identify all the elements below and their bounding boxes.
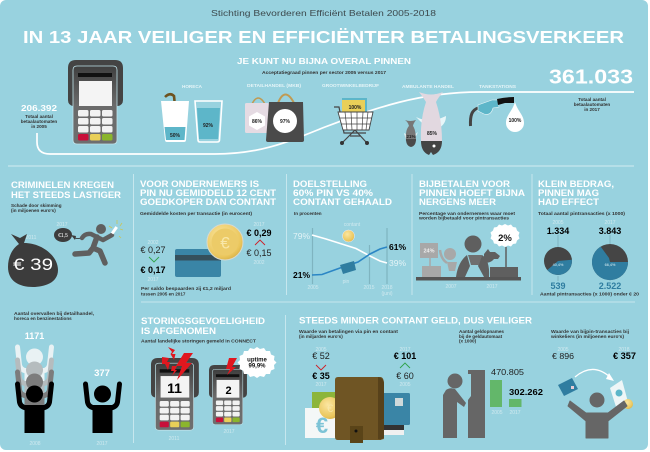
panel: bijbetalen [416, 179, 525, 290]
cost right: 2002 [253, 260, 265, 266]
panel: criminelen [8, 180, 123, 287]
panel: criminelen: 2017 [56, 222, 68, 228]
heading: VOOR ONDERNEMERS IS [140, 179, 259, 189]
panel: overvallen: 2017 [96, 441, 108, 447]
bar chart: opnames: 470.805 [491, 368, 525, 377]
note: tussen 2005 en 2017 [141, 292, 186, 296]
line chart [293, 222, 406, 297]
icon: lightning bolts [162, 347, 237, 380]
illustration: shop counter: 2017 [486, 284, 498, 290]
subtext: worden bijbetaald voor pintransacties [418, 216, 509, 220]
subtext left: (in miljarden euro's) [299, 334, 343, 339]
subtext middle: bij de geldautomaat [459, 334, 503, 339]
title: IN 13 JAAR VEILIGER EN EFFICIËNTER BETALINGSVERKEER [23, 27, 624, 47]
panel: minder contant [299, 316, 636, 443]
values pin: 2005 [315, 347, 327, 353]
horeca glasses: HORECA [182, 84, 203, 89]
subtext: Totaal aantal pintransacties (x 1000) [538, 211, 626, 216]
stat 2017: Totaal aantal [578, 97, 606, 102]
heading: NERGENS MEER [419, 197, 496, 207]
heading: STORINGSGEVOELIGHEID [141, 316, 265, 326]
stat 2005: in 2005 [31, 124, 47, 129]
icon: wallet with money: € [316, 413, 328, 438]
line chart: (juni) [381, 291, 393, 297]
callout: uptime: 99,9% [248, 364, 266, 370]
values contant: € 60 [396, 371, 414, 381]
icon: person with card and cash [558, 369, 633, 438]
icon: small money bag: €1,5 [58, 233, 68, 239]
pie 2005: 2005 [552, 220, 564, 226]
line chart: 79% [293, 231, 310, 241]
heading: HAD EFFECT [538, 197, 599, 207]
values bijpin: 2005 [557, 347, 569, 353]
callout: uptime: uptime [247, 358, 267, 364]
icon: bank card [175, 249, 221, 277]
groot winkelbedrijf cart [322, 83, 379, 145]
detailhandel bags: 86% [252, 119, 263, 125]
icon: payment terminal [68, 60, 123, 144]
growth curve [37, 92, 634, 154]
horeca glasses: 50% [170, 133, 181, 139]
line chart: 39% [389, 258, 406, 268]
icon: wallet with money: € [327, 403, 333, 415]
subtext: (in miljoenen euro's) [11, 208, 56, 213]
bar chart: opnames [490, 368, 544, 416]
groot winkelbedrijf cart: GROOTWINKELBEDRIJF [322, 83, 379, 88]
cost right: 2017 [253, 222, 265, 228]
icon: ATM user [443, 370, 485, 438]
stat 2017: in 2017 [584, 107, 600, 112]
subtext: horeca en benzinestations [14, 316, 72, 321]
stat 2017: 361.033 [549, 66, 633, 88]
heading: BIJBETALEN VOOR [419, 179, 510, 189]
pie 2005: 539 [550, 281, 566, 291]
horeca glasses: 92% [203, 123, 214, 129]
figure 2017 [86, 384, 120, 433]
panel: overvallen [14, 311, 120, 447]
icon: money bag 39: € 39 [13, 255, 53, 274]
bar chart: opnames: 302.262 [509, 388, 544, 397]
values bijpin: 2018 [618, 347, 630, 353]
line chart: 61% [389, 242, 406, 252]
line chart: 2018 [381, 285, 393, 291]
cost left: 2002 [147, 240, 159, 246]
pie 2017: 2017 [604, 220, 616, 226]
values pin: € 52 [312, 351, 330, 361]
panel: storingen [141, 316, 276, 442]
pie 2017: 2.522 [599, 281, 621, 291]
heading: GOEDKOPER DAN CONTANT [140, 197, 276, 207]
heading: DOELSTELLING [293, 179, 367, 189]
note: Per saldo bespaarden zij €1,2 miljard [141, 286, 231, 291]
stat 2005: betaalautomaten [21, 119, 57, 124]
subtext right: winkeliers (in miljoenen euro's) [550, 334, 624, 339]
subtext: Percentage van ondernemers waar moet [419, 211, 516, 216]
heading: CONTANT GEHAALD [293, 197, 392, 207]
subtext: Aantal landelijke storingen gemeld in CONNECT [141, 338, 256, 344]
heading: IS AFGENOMEN [141, 326, 216, 336]
horeca glasses [161, 84, 222, 142]
heading: KLEIN BEDRAG, [538, 179, 614, 189]
detailhandel bags: DETAILHANDEL (MKB) [247, 83, 302, 88]
line chart: 2015 [363, 285, 375, 291]
pie 2005 [544, 220, 572, 291]
panel: doelstelling [293, 179, 406, 297]
values contant [394, 347, 416, 388]
heading: CRIMINELEN KREGEN [11, 180, 114, 190]
panel: klein bedrag [538, 179, 639, 296]
values pin [312, 347, 330, 388]
ambulante handel fish [402, 84, 454, 155]
panel: ondernemers [140, 179, 276, 296]
stat 2005: 206.392 [21, 104, 58, 113]
line chart: 2005 [307, 285, 319, 291]
bar chart: opnames: 2005 [491, 410, 503, 416]
values bijpin [552, 347, 636, 361]
stat 2017 [549, 66, 633, 112]
subtext middle: (x 1000) [459, 338, 477, 344]
cost left: € 0,17 [140, 265, 166, 275]
detailhandel bags [245, 83, 304, 142]
cost right: € 0,15 [246, 248, 272, 258]
figures 2008 [18, 347, 52, 433]
values bijpin: € 357 [613, 351, 636, 361]
icon: euro coin: € [220, 234, 230, 252]
caption: Aantal pintransacties (x 1000) onder € 20 [540, 292, 639, 296]
panel: overvallen: 2008 [29, 441, 41, 447]
tankstations pump [470, 84, 524, 132]
subtext: Schade door skimming [11, 203, 62, 208]
terminal 2017 [209, 365, 247, 435]
icon: wallet with money [305, 377, 410, 443]
illustration: shop counter: 2007 [445, 284, 457, 290]
line chart: 21% [293, 270, 310, 280]
subtext middle: Aantal geldopnames [459, 329, 504, 334]
cost left [140, 240, 166, 283]
bar chart: opnames: 2017 [509, 410, 521, 416]
number 1171: 1171 [25, 331, 44, 341]
pie 2017 [592, 220, 628, 291]
stat 2017: betaalautomaten [574, 102, 610, 107]
panel: criminelen: 2011 [26, 235, 37, 241]
heading: 60% PIN VS 40% [293, 188, 373, 198]
subtext: In procenten [294, 211, 322, 216]
terminal 2017: 2 [225, 385, 232, 397]
heading: STEEDS MINDER CONTANT GELD, DUS VEILIGER [299, 316, 532, 326]
section heading: JE KUNT NU BIJNA OVERAL PINNEN [237, 56, 411, 66]
illustration: shop counter [416, 236, 521, 290]
section: overal pinnen [21, 56, 634, 155]
number 377: 377 [94, 368, 110, 379]
illustration: shop counter: 24% [423, 248, 435, 254]
cost left: € 0,27 [140, 245, 166, 255]
line chart: contant [344, 222, 361, 228]
tankstations pump: 100% [509, 118, 522, 124]
values contant: 2017 [399, 347, 411, 353]
line chart: pin [343, 279, 350, 285]
ambulante handel fish: AMBULANTE HANDEL [402, 84, 454, 89]
terminal 2017: 2017 [223, 429, 235, 435]
terminal 2011: 2011 [169, 436, 180, 442]
pie 2017: 66,4% [605, 263, 616, 267]
heading: PIN NU GEMIDDELD 12 CENT [140, 188, 276, 198]
heading: PINNEN MAG [538, 188, 599, 198]
cost right: € 0,29 [246, 228, 272, 238]
subtext: Gemiddelde kosten per transactie (in eurocent) [140, 211, 253, 216]
ambulante handel fish: 21% [406, 134, 416, 139]
section subheading: Acceptatiegraad pinnen per sector 2005 versus 2017 [262, 70, 386, 75]
heading: HET STEEDS LASTIGER [11, 190, 121, 200]
callout: 2%: 2% [498, 233, 512, 244]
pie 2017: 3.843 [599, 226, 621, 236]
subtext right: Waarde van bijpin-transacties bij [551, 329, 629, 334]
header subtitle: Stichting Bevorderen Efficiënt Betalen 2005-2018 [211, 8, 436, 18]
callout: uptime [238, 347, 276, 378]
terminal 2011 [151, 358, 199, 442]
tankstations pump: TANKSTATIONS [479, 84, 516, 89]
values bijpin: € 896 [552, 351, 574, 361]
subtext: Aantal overvallen bij detailhandel, [14, 311, 94, 316]
heading: PINNEN HOEFT BIJNA [419, 188, 525, 198]
cost right [246, 222, 272, 266]
stat 2005: Totaal aantal [25, 114, 53, 119]
values contant: € 101 [394, 351, 416, 361]
detailhandel bags: 97% [280, 119, 291, 125]
subtext left: Waarde van betalingen via pin en contant [299, 329, 399, 334]
values pin: 2017 [315, 382, 327, 388]
terminal 2011: 11 [167, 380, 182, 396]
pie 2005: 40,4% [553, 263, 564, 267]
ambulante handel fish: 85% [427, 131, 438, 137]
cost left: 2017 [147, 277, 159, 283]
pie 2005: 1.334 [547, 226, 569, 236]
icon: running thief [75, 220, 123, 263]
stat 2005 [21, 104, 58, 129]
values contant: 2005 [399, 382, 411, 388]
values pin: € 35 [312, 371, 330, 381]
groot winkelbedrijf cart: 100% [349, 105, 362, 111]
